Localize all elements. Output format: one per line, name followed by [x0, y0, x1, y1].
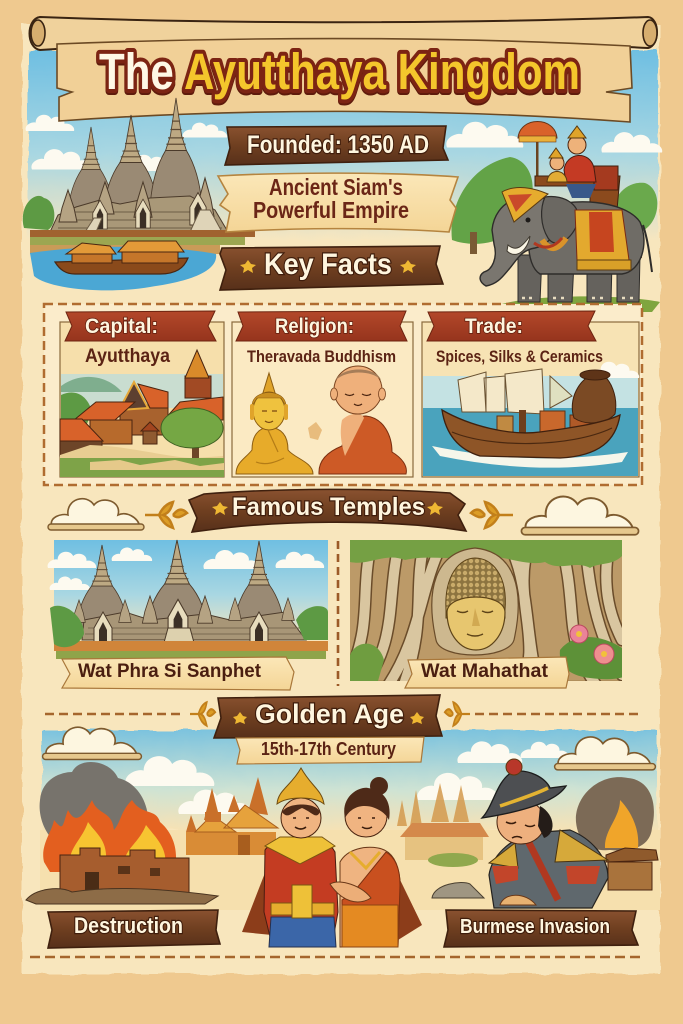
elephant with riders: [480, 122, 660, 312]
elephant body: [529, 202, 644, 274]
temple picture: wat mahathat: [350, 540, 622, 681]
golden age dividers: [45, 713, 640, 715]
umbrella: [518, 122, 557, 180]
tree: [23, 196, 54, 230]
heading text: Famous Temples: [232, 493, 425, 521]
soldier hands: [500, 895, 536, 905]
root frame around head: [432, 548, 518, 655]
century label: [236, 737, 424, 764]
destruction plaque: Destruction: [74, 913, 183, 938]
title plaque: [57, 39, 632, 122]
capital value: Ayutthaya: [85, 346, 170, 367]
elephant legs: [518, 255, 640, 302]
king head: [281, 798, 321, 838]
card: trade: [422, 311, 639, 477]
ship: [442, 369, 620, 458]
river: [30, 247, 216, 290]
capital ribbon: [65, 311, 216, 341]
elephant tail: [643, 225, 652, 272]
card: capital: [60, 311, 224, 477]
subtitle line 1: Ancient Siam's: [269, 174, 403, 200]
right landscape: trees: [452, 157, 657, 258]
burmese invasion plaque: Burmese Invasion: [460, 916, 610, 938]
elephant head and trunk: [480, 196, 557, 286]
golden age sprigs: [190, 702, 470, 726]
left temple illustration: [23, 98, 255, 254]
label: wat phra si sanphet: [62, 657, 294, 690]
bottom dashed rule: [30, 956, 645, 958]
label: wat mahathat: [405, 657, 569, 688]
king skirt: [269, 917, 336, 947]
buddha head: [446, 558, 505, 650]
capital heading: Capital:: [85, 315, 158, 338]
century label: 15th-17th Century: [261, 739, 396, 759]
title: The Ayutthaya Kingdom: [99, 43, 580, 100]
background temples left: [186, 777, 278, 855]
tusk: [507, 236, 530, 254]
religion heading: Religion:: [275, 315, 354, 338]
destruction smoke: [40, 762, 148, 854]
founded plaque: [225, 126, 448, 165]
religion value: Theravada Buddhism: [247, 347, 396, 366]
key facts stars: [240, 260, 416, 273]
label: wat phra si sanphet: Wat Phra Si Sanphet: [78, 661, 262, 682]
small rider: [547, 148, 567, 182]
top scroll banner: [30, 17, 657, 122]
religion ribbon: [236, 311, 407, 341]
clasped hands: [330, 882, 371, 902]
roots: [350, 558, 622, 681]
queen head: [345, 795, 387, 837]
trade heading: Trade:: [465, 315, 523, 338]
burning ruins: [26, 848, 218, 904]
golden age heading: [214, 695, 442, 738]
temple base: [82, 612, 306, 640]
card: religion: [232, 311, 413, 477]
decorative leaves: [308, 422, 322, 440]
king sash: [265, 837, 335, 864]
rubble: [26, 889, 218, 904]
temple wall: [54, 641, 328, 651]
soldier: [482, 759, 608, 908]
sea: [423, 408, 638, 476]
background temples right: [397, 783, 489, 860]
queen shawl: [388, 855, 422, 940]
saddle blanket: [575, 210, 629, 260]
trade ribbon: [427, 311, 596, 341]
scroll roll: [30, 17, 657, 50]
wall and lawn: [30, 230, 255, 237]
soldier pauldrons: [489, 830, 608, 868]
soldier body: [489, 830, 608, 908]
subtitle line 2: Powerful Empire: [253, 197, 409, 223]
buddha statue: [236, 373, 313, 474]
temple terraces: [50, 196, 228, 232]
famous temples heading: [189, 489, 466, 532]
trade sky: [423, 376, 638, 408]
soldier head: [497, 800, 545, 844]
foliage and flowers: [350, 644, 384, 681]
rider: [564, 126, 596, 198]
head cloth: [502, 188, 548, 222]
king: [242, 768, 338, 947]
dashed divider: [337, 541, 339, 686]
heading stars: [212, 502, 443, 515]
rocks: [432, 883, 484, 898]
queen body: [340, 847, 400, 947]
subtitle parchment: [218, 173, 458, 232]
king cape: [242, 860, 272, 935]
trade value: Spices, Silks & Ceramics: [436, 347, 603, 366]
boat: [55, 241, 188, 274]
howdah: [535, 176, 620, 210]
monk: [319, 366, 406, 474]
temple picture: wat phra si sanphet: [48, 540, 328, 659]
famous temples clouds: [48, 497, 639, 535]
key facts text: Key Facts: [264, 248, 392, 281]
top sky scene: [26, 50, 662, 240]
bottom scene sky: [40, 727, 660, 910]
famous temples sprigs: [145, 502, 513, 528]
founded text: Founded: 1350 AD: [247, 131, 429, 159]
bush: [428, 853, 478, 867]
flames: [43, 800, 176, 872]
trees: [50, 606, 84, 647]
elephant ear: [542, 197, 579, 243]
panel fill: [44, 304, 642, 485]
key facts panel: [44, 304, 642, 485]
label: wat mahathat: Wat Mahathat: [421, 661, 549, 682]
king body: [264, 839, 338, 945]
destruction plaque: [48, 910, 220, 948]
grass: [495, 296, 660, 312]
soldier sash: [525, 835, 558, 900]
capital scene: [60, 350, 224, 477]
golden age text: Golden Age: [255, 699, 404, 729]
soldier helmet: [482, 771, 566, 818]
leaves: [350, 540, 622, 568]
queen: [340, 777, 422, 947]
burmese invasion plaque: [444, 910, 638, 947]
key facts heading: [220, 246, 443, 290]
right smoke and fire: [576, 777, 658, 890]
hut: [606, 848, 658, 862]
